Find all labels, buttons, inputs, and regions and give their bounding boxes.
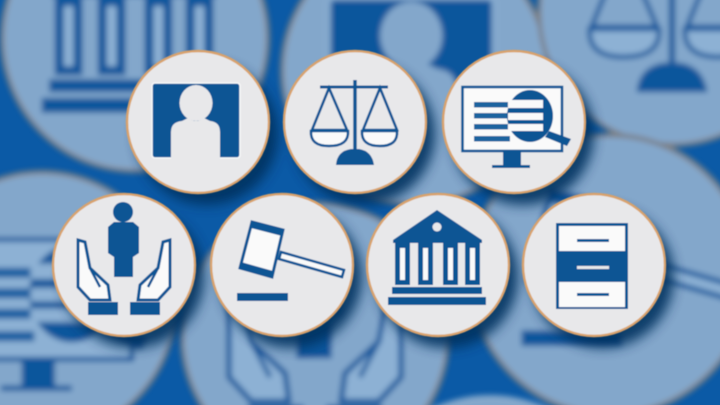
- blurred medallion: person: [282, 0, 548, 204]
- medallion: monitor with magnifier: [443, 51, 585, 193]
- medallion: scales of justice: [284, 51, 426, 193]
- medallion: hands protecting person: [53, 194, 195, 336]
- blurred medallion: building: [2, 0, 268, 171]
- medallion: filing cabinet: [523, 194, 665, 336]
- blurred medallion: scales: [539, 0, 720, 145]
- blurred medallion: hands: [182, 203, 448, 405]
- blurred medallion: gavel: [470, 135, 720, 405]
- medallion: person portrait: [127, 51, 269, 193]
- medallion: courthouse building: [367, 194, 509, 336]
- medallion: gavel: [211, 194, 353, 336]
- drop shadows of foreground medallions: [62, 63, 674, 348]
- blurred medallion: monitor: [0, 172, 175, 405]
- blurred medallion: small bottom edge: [355, 395, 625, 405]
